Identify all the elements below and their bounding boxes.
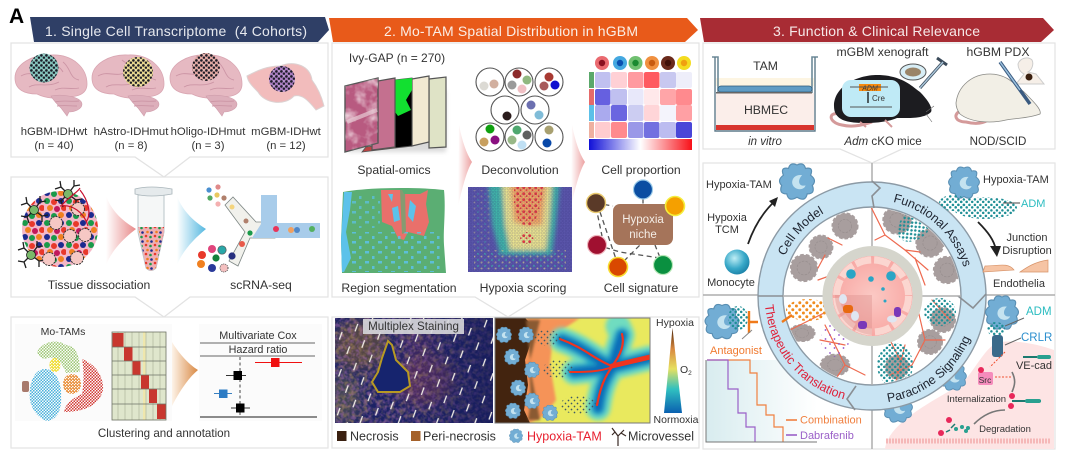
cohort label: mGBM: (n = 12) <box>266 140 306 152</box>
label: clustering and annotation: Clustering and annotation <box>98 427 230 440</box>
ring labels <box>765 194 972 402</box>
label: Ivy-GAP: Ivy-GAP (n = 270) <box>349 51 445 65</box>
cohort label: hOligo: hOligo-IDHmut <box>171 126 246 138</box>
arrow: pink <box>106 196 136 265</box>
panel: staining and model <box>332 316 700 448</box>
legend <box>337 428 694 446</box>
label: cell signature: Cell signature <box>604 281 678 295</box>
survival curve <box>706 360 862 442</box>
quadrant: cell model labels: Hypoxia-TAM <box>706 179 772 191</box>
header: 1. Single Cell Transcriptome: 1. Single Cell Transcriptome (4 Cohorts) <box>45 23 307 39</box>
arrow: orange <box>172 342 198 406</box>
transwell: in vitro <box>748 136 783 148</box>
ring labels: Functional Assays <box>894 194 970 266</box>
tumor tissue <box>18 180 98 268</box>
tumor cells and vessels <box>786 201 960 387</box>
header: 2. Mo-TAM Spatial Distribution: 2. Mo-TAM Spatial Distribution in hGBM <box>384 23 638 39</box>
microfluidic chip <box>197 184 320 272</box>
quadrant: paracrine signaling labels: Degradation <box>979 424 1031 435</box>
label: deconvolution: Deconvolution <box>481 163 559 177</box>
cohort label: hAstro <box>94 126 169 152</box>
slides stack <box>345 76 446 152</box>
quadrant: cell model labels: TCM <box>715 224 739 236</box>
arrow: pink 1 <box>458 125 472 206</box>
legend: Necrosis <box>350 430 399 444</box>
brain: hAstro <box>92 55 164 116</box>
label: tissue dissociation: Tissue dissociation <box>48 278 150 292</box>
cohort label: hGBM: hGBM-IDHwt <box>21 126 88 138</box>
mouse: black: ADM <box>861 86 878 92</box>
quadrant: therapeutic translation labels: Antagonist <box>710 345 762 357</box>
oxygen colour scale: O <box>680 364 688 376</box>
panel: cohorts <box>11 43 328 177</box>
tSNE plot: Mo-TAMs <box>41 326 85 338</box>
cohort label: hAstro: hAstro-IDHmut <box>94 126 169 138</box>
brain: hGBM <box>15 54 87 116</box>
quadrant: paracrine signaling labels: ADM <box>1026 306 1052 318</box>
transwell <box>712 57 818 148</box>
quadrant: functional assays labels: Disruption <box>1002 245 1052 257</box>
label: hypoxia scoring: Hypoxia scoring <box>480 281 566 295</box>
legend: Hypoxia-TAM <box>527 430 602 444</box>
legend: Microvessel <box>628 430 694 444</box>
header: 3. Function and Clinical Relevance: 3. Function & Clinical Relevance <box>773 23 980 39</box>
niche network: Hypoxia <box>622 214 664 226</box>
heatmap <box>112 332 166 420</box>
panel: models <box>703 43 1055 163</box>
hypoxia scoring map <box>468 183 572 272</box>
quadrant: paracrine signaling labels: CRLR <box>1021 332 1052 344</box>
arrow: pink 2 <box>571 125 585 206</box>
ring labels: Therapeutic Translation <box>765 304 845 400</box>
oxygen colour scale: Normoxia <box>654 414 699 426</box>
quadrant: functional assays labels: Junction <box>1007 232 1047 244</box>
cohort label: mGBM: mGBM-IDHwt <box>251 126 322 138</box>
header: 1. Single Cell Transcriptome <box>30 17 329 42</box>
quadrant: cell model labels: Hypoxia <box>707 212 748 224</box>
mouse: black <box>831 45 947 148</box>
mouse: black: mGBM xenograft <box>836 45 929 59</box>
label: spatial-omics: Spatial-omics <box>357 163 431 177</box>
quadrant: paracrine signaling labels: Internalization <box>947 394 1006 405</box>
arrow: blue <box>177 196 206 265</box>
legend: Peri-necrosis <box>423 430 496 444</box>
cohort label: hGBM <box>21 126 88 152</box>
cohort label: hGBM: (n = 40) <box>34 140 74 152</box>
panel letter A: A <box>9 5 24 28</box>
forest plot <box>199 324 322 421</box>
brain: hOligo <box>170 53 242 116</box>
quadrant: functional assays labels: ADM <box>1021 198 1045 210</box>
panel: spatial workflow <box>332 43 699 317</box>
quadrant: cell model labels <box>706 164 814 289</box>
forest plot: Hazard ratio <box>229 344 287 356</box>
heatmap: cell proportion <box>589 56 692 150</box>
mouse: white <box>956 45 1044 148</box>
central vessel <box>828 251 918 341</box>
quadrant: functional assays labels: Hypoxia-TAM <box>983 174 1049 186</box>
mouse: white: NOD/SCID <box>970 135 1026 148</box>
tSNE plot <box>15 324 172 421</box>
quadrant: functional assays labels: Endothelia <box>993 278 1046 290</box>
niche network <box>586 180 684 276</box>
quadrant: paracrine signaling labels <box>886 296 1052 441</box>
panel: clustering <box>11 297 328 448</box>
panel: scRNA workflow <box>11 157 328 317</box>
cohort label: hOligo: (n = 3) <box>192 140 225 152</box>
quadrant: cell model labels: Monocyte <box>707 277 755 289</box>
label: scRNA-seq: scRNA-seq <box>230 278 292 292</box>
cohort label: mGBM <box>251 126 322 152</box>
header: 3. Function and Clinical Relevance <box>700 18 1054 42</box>
survival curve: Combination <box>800 414 862 426</box>
niche network: niche <box>629 229 657 241</box>
label: cell proportion: Cell proportion <box>601 163 681 177</box>
label: region segmentation: Region segmentation <box>341 281 457 295</box>
deconvolution spots <box>476 68 563 151</box>
cohort label: hAstro: (n = 8) <box>115 140 148 152</box>
oxygen colour scale <box>654 317 699 426</box>
forest plot: Multivariate Cox <box>219 330 297 342</box>
mouse: black: Cre <box>872 94 885 103</box>
oxygen colour scale: 2 <box>688 370 692 377</box>
cohort label: hOligo <box>171 126 246 152</box>
panel: function circle <box>702 162 1056 450</box>
header: 2. Mo-TAM Spatial Distribution <box>329 18 698 42</box>
quadrant: functional assays labels <box>939 167 1052 290</box>
quadrant: paracrine signaling labels: Src <box>979 375 992 385</box>
multiplex staining image: Multiplex Staining <box>368 320 459 333</box>
multiplex staining image <box>329 318 493 423</box>
ring labels: Paracrine Signaling <box>887 336 972 402</box>
oxygen colour scale: Hypoxia <box>656 317 694 329</box>
brain: mouse <box>247 64 324 110</box>
quadrant: paracrine signaling labels: VE-cad <box>1016 360 1052 372</box>
quadrant: therapeutic translation labels <box>705 304 792 357</box>
icon: test tube <box>135 187 172 270</box>
ring labels: Cell Model <box>778 206 824 254</box>
ring <box>758 181 986 410</box>
mouse: black: Adm cKO mice <box>843 135 922 148</box>
transwell: TAM <box>753 59 778 73</box>
mouse: white: hGBM PDX <box>966 45 1030 59</box>
region segmentation map <box>341 188 446 273</box>
survival curve: Dabrafenib <box>800 430 854 442</box>
transwell: HBMEC <box>744 103 788 117</box>
oxygen diffusion diagram <box>495 318 650 423</box>
